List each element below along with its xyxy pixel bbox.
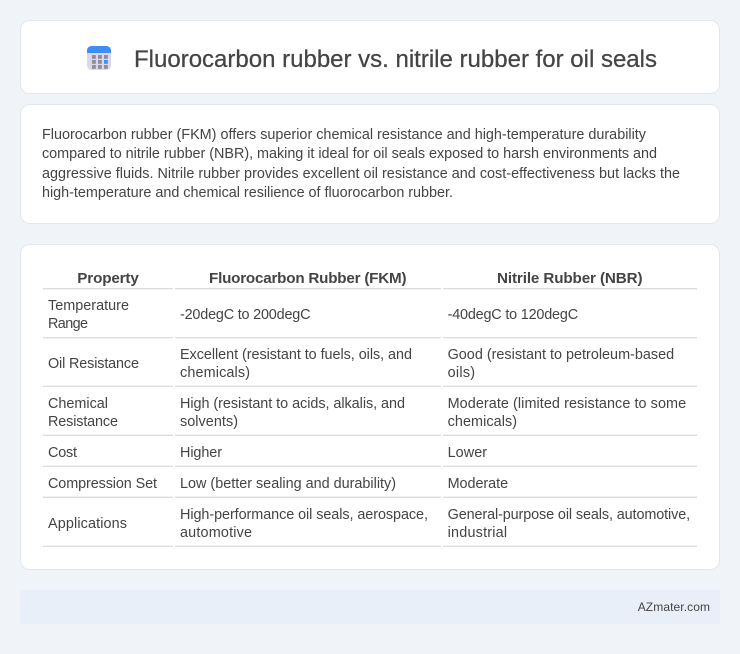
- summary text: aggressive fluids. Nitrile rubber provides excellent oil resistance and cost-effectiveness but lacks the: [42, 166, 680, 182]
- footer brand text: AZmater.com: [638, 600, 710, 614]
- row: chemical resistance: chemicals): [448, 414, 517, 430]
- panel: title card: [20, 20, 720, 94]
- row: compression set: Compression Set: [48, 476, 157, 492]
- summary text: [42, 127, 680, 201]
- row: compression set: Low (better sealing and durability): [180, 476, 396, 492]
- row: chemical resistance: High (resistant to acids, alkalis, and: [180, 396, 405, 412]
- row: chemical resistance: solvents): [180, 414, 238, 430]
- row: oil resistance: chemicals): [180, 365, 250, 381]
- row: oil resistance: Excellent (resistant to fuels, oils, and: [180, 347, 412, 363]
- row: compression set: [48, 476, 508, 492]
- row: applications: automotive: [180, 525, 252, 541]
- row: cost: Cost: [48, 445, 77, 461]
- row: applications: High-performance oil seals, aerospace,: [180, 507, 428, 523]
- row: cost: Higher: [180, 445, 222, 461]
- row: oil resistance: oils): [448, 365, 475, 381]
- panel: summary: [20, 104, 720, 224]
- title: Fluorocarbon rubber vs. nitrile rubber for oil seals: [134, 46, 657, 73]
- row: chemical resistance: [48, 396, 686, 430]
- summary text: Fluorocarbon rubber (FKM) offers superior chemical resistance and high-temperature durability: [42, 127, 647, 143]
- row: temperature range: Temperature: [48, 298, 129, 314]
- row: oil resistance: Good (resistant to petroleum-based: [448, 347, 674, 363]
- row: applications: industrial: [448, 525, 507, 541]
- row: applications: Applications: [48, 516, 127, 532]
- row: chemical resistance: Moderate (limited resistance to some: [448, 396, 686, 412]
- summary text: compared to nitrile rubber (NBR), making it ideal for oil seals exposed to harsh environments and: [42, 146, 657, 162]
- row: oil resistance: Oil Resistance: [48, 356, 139, 372]
- footer: [20, 590, 720, 624]
- row: temperature range: [48, 298, 578, 332]
- row: cost: [48, 445, 487, 461]
- row: compression set: Moderate: [448, 476, 508, 492]
- row: temperature range: -40degC to 120degC: [448, 307, 578, 323]
- row: cost: Lower: [448, 445, 487, 461]
- table header row: [77, 270, 643, 287]
- table header row: Nitrile Rubber (NBR): [497, 270, 642, 287]
- summary text: high-temperature and chemical resilience of fluorocarbon rubber.: [42, 185, 453, 201]
- row: temperature range: Range: [48, 316, 88, 332]
- panel: comparison table: [20, 244, 720, 570]
- table header row: Fluorocarbon Rubber (FKM): [209, 270, 406, 287]
- row: temperature range: -20degC to 200degC: [180, 307, 310, 323]
- icon: calendar: [87, 46, 111, 70]
- table header row: Property: [77, 270, 139, 287]
- row: chemical resistance: Resistance: [48, 414, 118, 430]
- row: applications: General-purpose oil seals, automotive,: [448, 507, 690, 523]
- row: oil resistance: [48, 347, 674, 381]
- row: applications: [48, 507, 690, 541]
- row: chemical resistance: Chemical: [48, 396, 108, 412]
